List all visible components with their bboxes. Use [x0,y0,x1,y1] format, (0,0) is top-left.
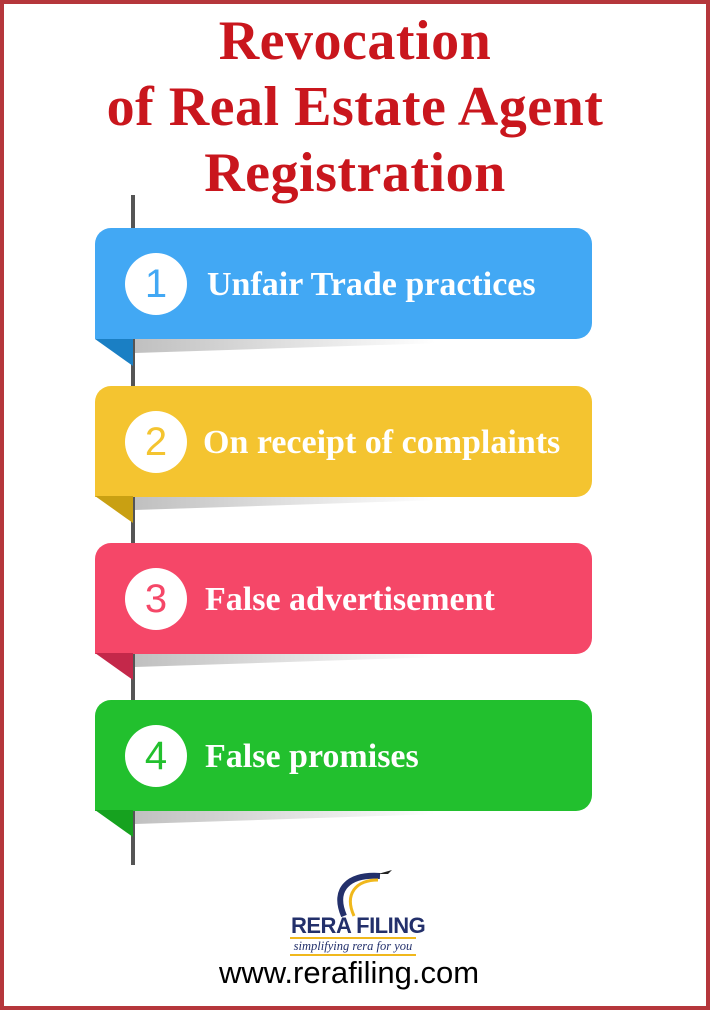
website: www.rerafiling.com [219,955,479,990]
item 1: Unfair Trade practices [207,266,536,303]
item 1: 1 [145,262,167,306]
logo [290,870,425,956]
item 4: False promises [205,738,419,775]
title: of Real Estate Agent [107,76,603,138]
timeline line [131,195,135,865]
logo: simplifying rera for you [294,939,412,953]
title: Revocation [219,10,491,72]
item 3: False advertisement [205,581,495,618]
item 3 [95,543,592,654]
item 2 [95,386,592,497]
title: Registration [204,142,506,204]
item 1 [95,228,592,339]
logo: RERA FILING [291,913,425,938]
item 2: On receipt of complaints [203,424,560,461]
item 4 [95,700,592,811]
item 4: 4 [145,734,167,778]
title [107,10,603,204]
item 3: 3 [145,577,167,621]
item 2: 2 [145,420,167,464]
